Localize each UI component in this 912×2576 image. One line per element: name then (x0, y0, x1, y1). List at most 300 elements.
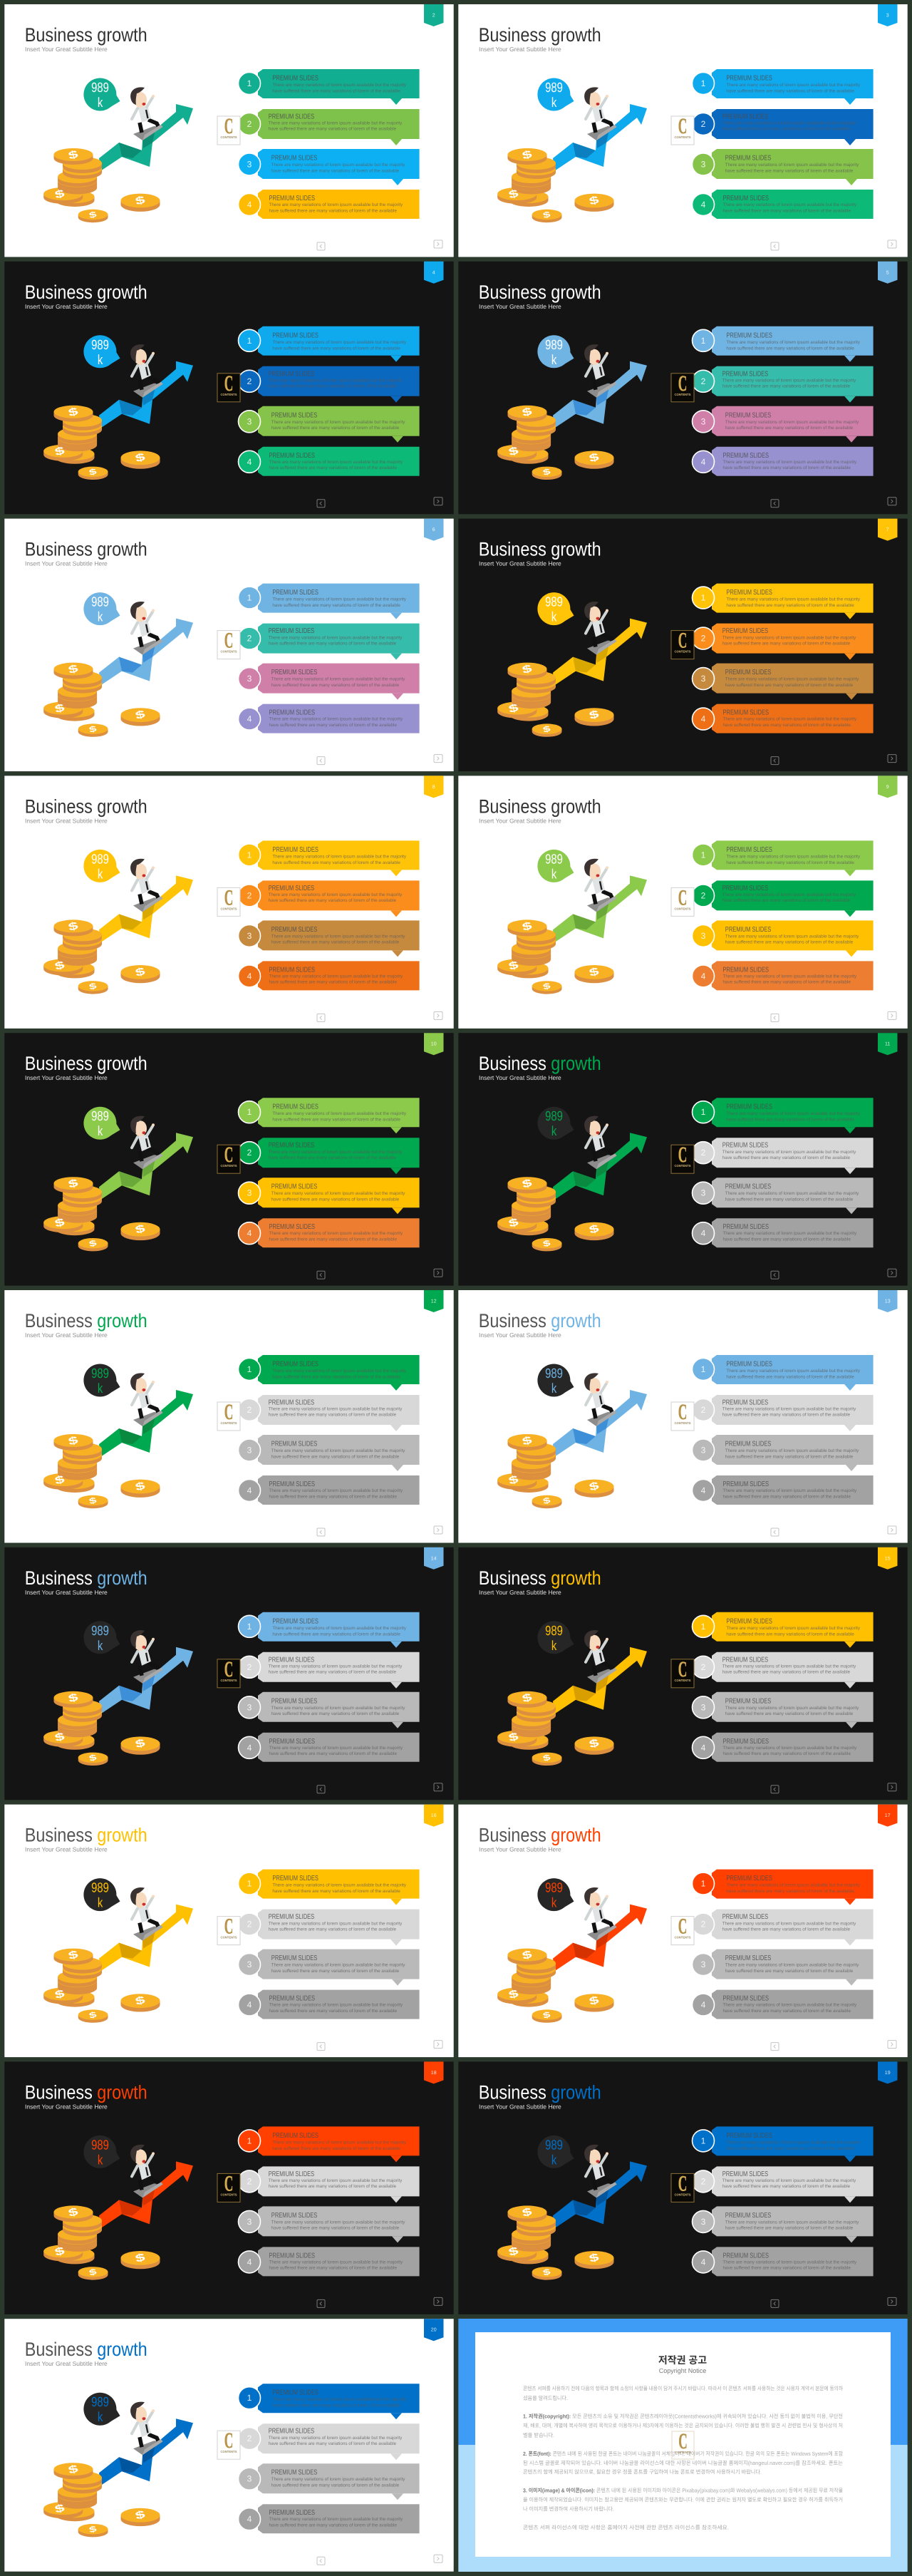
speech bubble: 989 (91, 1366, 109, 1381)
list item 1: 1 (247, 2135, 252, 2145)
page tag (424, 2319, 443, 2341)
list item 1: PREMIUM SLIDES (726, 589, 772, 597)
speech bubble (83, 1364, 120, 1397)
list item 3: have suffered there are many variations of lorem of the available (725, 1454, 854, 1459)
illustration: coins, arrow, businessman: $ (67, 1177, 80, 1191)
logo badge (217, 1142, 240, 1173)
list item 2: PREMIUM SLIDES (722, 113, 768, 121)
list item 2: PREMIUM SLIDES (722, 885, 768, 892)
list item 4 (238, 2247, 420, 2276)
illustration: coins, arrow, businessman: $ (134, 193, 147, 208)
illustration: coins, arrow, businessman: $ (88, 2267, 98, 2278)
logo badge: C (224, 885, 233, 910)
logo badge: CONTENTS (674, 135, 691, 139)
illustration: coins, arrow, businessman: $ (588, 2251, 601, 2265)
list item 4: There are many variations of lorem ipsum available but the majority (269, 1488, 403, 1493)
list item 2: 2 (247, 1405, 252, 1415)
illustration: coins, arrow, businessman: $ (67, 2205, 80, 2220)
list item 2: 2 (247, 634, 252, 644)
speech bubble: 989 (545, 338, 563, 353)
speech bubble: 989 (545, 852, 563, 867)
logo badge: CONTENTS (220, 1679, 237, 1682)
list item 3: PREMIUM SLIDES (271, 1697, 318, 1705)
list item 3: 3 (701, 160, 706, 170)
notice body text: 2. 폰트(font): 콘텐츠 내에 된 사용된 한글 폰트는 네이버 나눔글꼴의 서체입니다. 네이버가 저작권이 있습니다. 한글 외의 모든 폰트는 Windows System에 포함 (523, 2451, 843, 2457)
list item 3: have suffered there are many variations of lorem of the available (725, 1969, 854, 1974)
list item 3 (238, 1949, 420, 1986)
subtitle: Insert Your Great Subtitle Here (479, 817, 561, 824)
speech bubble: 989 (91, 1881, 109, 1896)
list item 2 (693, 1395, 874, 1431)
illustration: coins, arrow, businessman (497, 2145, 647, 2280)
list item 3 (693, 2206, 874, 2242)
list item 1 (238, 1098, 420, 1133)
list item 3: There are many variations of lorem ipsum available but the majority (271, 2477, 405, 2482)
illustration: coins, arrow, businessman: $ (588, 1222, 601, 1237)
list item 4 (238, 1218, 420, 1247)
page tag (878, 1547, 898, 1570)
illustration: coins, arrow, businessman (43, 344, 193, 480)
list item 2: PREMIUM SLIDES (269, 1398, 314, 1407)
list item 1: have suffered there are many variations of lorem of the available (726, 1118, 854, 1123)
list item 3 (238, 2463, 420, 2500)
list item 2 (238, 624, 420, 660)
list item 1: have suffered there are many variations of lorem of the available (726, 860, 854, 865)
logo badge: C (678, 885, 687, 910)
list item 1: There are many variations of lorem ipsum available but the majority (272, 340, 407, 345)
page tag (878, 1290, 898, 1312)
list item 1: 1 (247, 2393, 252, 2403)
list item 2 (238, 1138, 420, 1174)
list item 2: PREMIUM SLIDES (269, 113, 314, 121)
list item 4 (238, 961, 420, 990)
page tag: 20 (431, 2328, 437, 2333)
logo badge: C (678, 1142, 687, 1167)
title: Business growth (25, 1053, 147, 1074)
speech bubble (537, 1621, 574, 1654)
list item 1: have suffered there are many variations of lorem of the available (726, 1889, 854, 1894)
title: Business growth (479, 539, 601, 560)
illustration: coins, arrow, businessman (43, 2402, 193, 2537)
list item 2 (693, 2166, 874, 2203)
list item 3: 3 (701, 1188, 706, 1198)
logo badge (671, 1914, 694, 1945)
list item 1 (693, 1870, 874, 1905)
list item 2: There are many variations of lorem ipsum available but the majority (722, 1150, 856, 1155)
list item 4: There are many variations of lorem ipsum available but the majority (722, 460, 857, 465)
list item 2 (238, 366, 420, 403)
list item 3: There are many variations of lorem ipsum available but the majority (725, 2220, 859, 2225)
illustration: coins, arrow, businessman: $ (53, 187, 66, 202)
list item 2: have suffered there are many variations of lorem of the available (722, 1670, 851, 1675)
list item 4: PREMIUM SLIDES (722, 452, 769, 460)
list item 1: 1 (247, 1879, 252, 1889)
list item 4: 4 (247, 1485, 252, 1495)
list item 3 (238, 2206, 420, 2242)
navigation buttons (771, 240, 896, 250)
notice body text: 콘텐츠 서퍼 라이선스에 대한 사항은 홈페이지 사전에 관한 콘텐츠 라이선스를 참조하세요. (523, 2525, 729, 2531)
illustration: coins, arrow, businessman: $ (67, 148, 80, 163)
list item 3: PREMIUM SLIDES (725, 669, 772, 676)
slide 12 (4, 1290, 454, 1542)
speech bubble (83, 78, 120, 111)
list item 3: 3 (701, 674, 706, 684)
navigation buttons (317, 2555, 442, 2565)
list item 1: PREMIUM SLIDES (726, 1617, 772, 1625)
speech bubble: k (551, 1124, 557, 1139)
list item 3: 3 (701, 1959, 706, 1969)
list item 1: PREMIUM SLIDES (726, 74, 772, 83)
list item 4: have suffered there are many variations of lorem of the available (269, 980, 397, 985)
list item 4: There are many variations of lorem ipsum available but the majority (722, 1746, 857, 1751)
list item 4: have suffered there are many variations of lorem of the available (722, 1751, 851, 1756)
subtitle: Insert Your Great Subtitle Here (25, 1846, 108, 1853)
list item 1: 1 (247, 78, 252, 88)
list item 1: There are many variations of lorem ipsum available but the majority (272, 2140, 407, 2145)
list item 1 (238, 2384, 420, 2419)
list item 4: 4 (247, 457, 252, 467)
list item 4: 4 (247, 714, 252, 724)
illustration: coins, arrow, businessman: $ (134, 450, 147, 465)
list item 4: There are many variations of lorem ipsum available but the majority (722, 2260, 857, 2265)
illustration: coins, arrow, businessman: $ (521, 1691, 534, 1705)
list item 2: have suffered there are many variations of lorem of the available (269, 898, 397, 903)
notice heading: 저작권 공고 (658, 2354, 707, 2366)
list item 3: have suffered there are many variations of lorem of the available (271, 1197, 400, 1202)
list item 4: have suffered there are many variations of lorem of the available (722, 1494, 851, 1499)
title: Business growth (25, 2339, 147, 2360)
list item 3: have suffered there are many variations of lorem of the available (271, 683, 400, 688)
list item 4: 4 (701, 200, 706, 210)
list item 1: 1 (701, 1107, 706, 1117)
list item 4: have suffered there are many variations of lorem of the available (269, 1751, 397, 1756)
illustration: coins, arrow, businessman: $ (542, 468, 552, 478)
title: Business growth (25, 539, 147, 560)
speech bubble (83, 335, 120, 368)
list item 3 (238, 406, 420, 443)
list item 3: PREMIUM SLIDES (271, 1183, 318, 1191)
list item 1: There are many variations of lorem ipsum available but the majority (272, 1369, 407, 1374)
page tag: 6 (432, 527, 435, 532)
navigation buttons (317, 1011, 442, 1021)
logo badge: C (678, 1657, 687, 1681)
slide 16 (4, 1805, 454, 2057)
list item 2: There are many variations of lorem ipsum available but the majority (269, 121, 403, 126)
page tag (424, 262, 443, 284)
slide 3 (458, 4, 908, 257)
logo badge: C (224, 1657, 233, 1681)
list item 4 (693, 190, 874, 219)
list item 3 (693, 920, 874, 957)
list item 4: have suffered there are many variations of lorem of the available (722, 1237, 851, 1242)
speech bubble: k (98, 1639, 103, 1654)
illustration: coins, arrow, businessman: $ (88, 1753, 98, 1763)
list item 3: PREMIUM SLIDES (725, 2212, 772, 2220)
slide: copyright notice (458, 2319, 908, 2572)
slide 9 (458, 776, 908, 1029)
list item 1: PREMIUM SLIDES (272, 589, 318, 597)
list item 2: 2 (247, 890, 252, 900)
list item 2: 2 (247, 1920, 252, 1930)
notice body text: 1. 저작권(copyright): 모든 콘텐츠의 소유 및 저작권은 콘텐츠레이아웃(Contentstheworks)에 귀속되어져 있습니다. 사전 동의 없이 불법적 이용, 무단전 (523, 2413, 843, 2419)
logo badge: CONTENTS (220, 393, 237, 396)
list item 4: have suffered there are many variations of lorem of the available (269, 1237, 397, 1242)
list item 2: PREMIUM SLIDES (722, 1398, 768, 1407)
list item 2: PREMIUM SLIDES (269, 1913, 314, 1921)
illustration: coins, arrow, businessman: $ (53, 1730, 66, 1744)
illustration: coins, arrow, businessman: $ (521, 148, 534, 163)
page tag (878, 776, 898, 798)
illustration: coins, arrow, businessman: $ (88, 2525, 98, 2535)
list item 2: 2 (247, 119, 252, 129)
page tag (878, 2061, 898, 2083)
list item 3: 3 (701, 931, 706, 941)
list item 2: PREMIUM SLIDES (269, 1656, 314, 1664)
list item 4: have suffered there are many variations of lorem of the available (269, 465, 397, 470)
illustration: coins, arrow, businessman: $ (507, 959, 520, 973)
speech bubble: 989 (91, 338, 109, 353)
title: Business growth (25, 282, 147, 303)
page tag: 10 (431, 1042, 437, 1047)
list item 4: have suffered there are many variations of lorem of the available (722, 723, 851, 728)
list item 1: have suffered there are many variations of lorem of the available (272, 346, 400, 351)
speech bubble: k (98, 353, 103, 368)
illustration: coins, arrow, businessman: $ (542, 1239, 552, 1249)
speech bubble (83, 1621, 120, 1654)
speech bubble (537, 335, 574, 368)
list item 3: 3 (701, 416, 706, 426)
page tag: 16 (431, 1813, 437, 1818)
list item 3: There are many variations of lorem ipsum available but the majority (725, 1448, 859, 1453)
speech bubble (83, 592, 120, 625)
list item 1: There are many variations of lorem ipsum available but the majority (272, 2397, 407, 2402)
list item 4 (693, 2247, 874, 2276)
navigation buttons (317, 755, 442, 765)
logo badge: C (678, 2170, 687, 2195)
list item 3 (693, 664, 874, 700)
illustration: coins, arrow, businessman: $ (588, 965, 601, 979)
list item 1 (693, 1612, 874, 1648)
list item 3: There are many variations of lorem ipsum available but the majority (725, 1706, 859, 1711)
logo badge (671, 885, 694, 916)
navigation buttons (317, 498, 442, 508)
title: Business growth (25, 1567, 147, 1589)
navigation buttons (771, 2297, 896, 2307)
illustration: coins, arrow, businessman (497, 1887, 647, 2023)
speech bubble: 989 (545, 81, 563, 96)
list item 3: have suffered there are many variations of lorem of the available (271, 2483, 400, 2488)
illustration: coins, arrow, businessman: $ (507, 187, 520, 202)
list item 4 (238, 190, 420, 219)
illustration: coins, arrow, businessman: $ (53, 2245, 66, 2259)
subtitle: Insert Your Great Subtitle Here (25, 2103, 108, 2110)
logo badge: CONTENTS (220, 1936, 237, 1939)
illustration: coins, arrow, businessman: $ (88, 210, 98, 220)
list item 2: There are many variations of lorem ipsum available but the majority (722, 121, 856, 126)
speech bubble: 989 (545, 2138, 563, 2153)
list item 2: 2 (247, 1148, 252, 1158)
list item 3: have suffered there are many variations of lorem of the available (725, 683, 854, 688)
list item 2: There are many variations of lorem ipsum available but the majority (722, 1407, 856, 1412)
speech bubble (537, 850, 574, 882)
page tag: 19 (885, 2071, 891, 2076)
list item 2: 2 (701, 634, 706, 644)
list item 4: have suffered there are many variations of lorem of the available (269, 2009, 397, 2014)
list item 4: There are many variations of lorem ipsum available but the majority (269, 2003, 403, 2008)
list item 3: have suffered there are many variations of lorem of the available (271, 940, 400, 945)
list item 2: There are many variations of lorem ipsum available but the majority (722, 1921, 856, 1926)
list item 3: There are many variations of lorem ipsum available but the majority (271, 1448, 405, 1453)
logo badge: C (224, 1914, 233, 1939)
title: Business growth (479, 1825, 601, 1846)
list item 1: There are many variations of lorem ipsum available but the majority (726, 2140, 861, 2145)
list item 4: PREMIUM SLIDES (269, 966, 315, 974)
list item 1 (238, 69, 420, 105)
list item 4: 4 (247, 200, 252, 210)
list item 1: There are many variations of lorem ipsum available but the majority (726, 854, 861, 859)
list item 4: 4 (701, 2257, 706, 2267)
list item 1: have suffered there are many variations of lorem of the available (726, 346, 854, 351)
page tag (878, 262, 898, 284)
list item 1: have suffered there are many variations of lorem of the available (726, 88, 854, 94)
list item 3: 3 (247, 1959, 252, 1969)
list item 3: There are many variations of lorem ipsum available but the majority (271, 1706, 405, 1711)
list item 4: There are many variations of lorem ipsum available but the majority (269, 1231, 403, 1236)
list item 4: PREMIUM SLIDES (269, 452, 315, 460)
list item 2: 2 (247, 2176, 252, 2186)
list item 1: There are many variations of lorem ipsum available but the majority (272, 597, 407, 602)
list item 4: There are many variations of lorem ipsum available but the majority (722, 717, 857, 722)
list item 1: have suffered there are many variations of lorem of the available (726, 1374, 854, 1380)
page tag: 15 (885, 1556, 891, 1561)
speech bubble (537, 1364, 574, 1397)
illustration: coins, arrow, businessman (43, 2145, 193, 2280)
logo badge: CONTENTS (220, 650, 237, 654)
illustration: coins, arrow, businessman: $ (542, 982, 552, 992)
speech bubble: 989 (91, 2395, 109, 2410)
speech bubble (83, 1107, 120, 1140)
list item 1: 1 (247, 593, 252, 603)
list item 1: PREMIUM SLIDES (726, 1103, 772, 1111)
list item 2: have suffered there are many variations of lorem of the available (722, 383, 851, 388)
slide 11 (458, 1033, 908, 1286)
speech bubble: k (551, 867, 557, 882)
list item 3: PREMIUM SLIDES (725, 1697, 772, 1705)
speech bubble (83, 850, 120, 882)
list item 3: 3 (247, 1188, 252, 1198)
list item 4: have suffered there are many variations of lorem of the available (722, 2009, 851, 2014)
title: Business growth (25, 24, 147, 46)
list item 3: There are many variations of lorem ipsum available but the majority (725, 1191, 859, 1196)
list item 3: PREMIUM SLIDES (271, 2212, 318, 2220)
illustration: coins, arrow, businessman: $ (507, 1473, 520, 1488)
list item 1: PREMIUM SLIDES (272, 1617, 318, 1625)
page tag (424, 519, 443, 541)
page tag (424, 1033, 443, 1055)
list item 1: PREMIUM SLIDES (726, 1360, 772, 1369)
logo badge: C (224, 113, 233, 138)
speech bubble: 989 (91, 1109, 109, 1124)
list item 2: have suffered there are many variations of lorem of the available (269, 383, 397, 388)
list item 4: PREMIUM SLIDES (269, 1738, 315, 1746)
list item 2: PREMIUM SLIDES (269, 1142, 314, 1150)
illustration: coins, arrow, businessman: $ (521, 1177, 534, 1191)
list item 2: 2 (701, 119, 706, 129)
list item 1: have suffered there are many variations of lorem of the available (272, 1632, 400, 1637)
list item 1: PREMIUM SLIDES (272, 1103, 318, 1111)
list item 4: 4 (701, 971, 706, 981)
illustration: coins, arrow, businessman: $ (88, 2010, 98, 2021)
speech bubble: k (551, 1896, 557, 1911)
navigation buttons (771, 1783, 896, 1793)
illustration: coins, arrow, businessman: $ (507, 444, 520, 458)
list item 3: 3 (247, 2474, 252, 2484)
illustration: coins, arrow, businessman: $ (134, 2251, 147, 2265)
list item 3 (238, 664, 420, 700)
list item 4: PREMIUM SLIDES (722, 2252, 769, 2260)
list item 3: PREMIUM SLIDES (725, 1440, 772, 1448)
list item 2: There are many variations of lorem ipsum available but the majority (269, 1150, 403, 1155)
list item 2: There are many variations of lorem ipsum available but the majority (269, 1921, 403, 1926)
logo badge: CONTENTS (220, 1164, 237, 1168)
page tag (424, 1547, 443, 1570)
illustration: coins, arrow, businessman: $ (507, 701, 520, 716)
illustration: coins, arrow, businessman: $ (542, 724, 552, 735)
page tag (878, 4, 898, 26)
navigation buttons (317, 1783, 442, 1793)
list item 3: There are many variations of lorem ipsum available but the majority (271, 2220, 405, 2225)
notice body text: 재, 배포, 대여, 개별에 복사하여 영리 목적으로 이용하거나 제3자에게 이용하는 것은 금지되어 있습니다. 이러한 불법 행위 발견 시 관련법 민사 및 형사상의 처 (523, 2422, 843, 2429)
list item 3: There are many variations of lorem ipsum available but the majority (271, 420, 405, 425)
logo badge: CONTENTS (674, 650, 691, 654)
logo badge (217, 2170, 240, 2202)
list item 3: There are many variations of lorem ipsum available but the majority (725, 677, 859, 682)
list item 3: have suffered there are many variations of lorem of the available (271, 2226, 400, 2231)
list item 2 (693, 109, 874, 145)
page tag (424, 1805, 443, 1827)
list item 3: 3 (247, 416, 252, 426)
logo badge (671, 1142, 694, 1173)
speech bubble (537, 1107, 574, 1140)
logo badge: CONTENTS (674, 1936, 691, 1939)
list item 1: 1 (701, 78, 706, 88)
list item 1: have suffered there are many variations of lorem of the available (726, 2146, 854, 2151)
list item 3 (238, 1435, 420, 1471)
illustration: coins, arrow, businessman: $ (134, 1222, 147, 1237)
illustration: coins, arrow, businessman (43, 1630, 193, 1766)
subtitle: Insert Your Great Subtitle Here (479, 1846, 561, 1853)
list item 4: There are many variations of lorem ipsum available but the majority (722, 2003, 857, 2008)
list item 4: have suffered there are many variations of lorem of the available (269, 1494, 397, 1499)
speech bubble: k (551, 353, 557, 368)
illustration: coins, arrow, businessman (497, 1630, 647, 1766)
illustration: coins, arrow, businessman: $ (53, 1216, 66, 1230)
list item 3 (693, 406, 874, 443)
illustration: coins, arrow, businessman: $ (588, 450, 601, 465)
list item 1: PREMIUM SLIDES (272, 1360, 318, 1369)
list item 1 (238, 1870, 420, 1905)
list item 2 (238, 2166, 420, 2203)
list item 4: have suffered there are many variations of lorem of the available (722, 2266, 851, 2271)
title: Business growth (25, 795, 147, 817)
list item 4: PREMIUM SLIDES (269, 195, 315, 202)
illustration: coins, arrow, businessman: $ (588, 1994, 601, 2008)
speech bubble: k (98, 96, 103, 110)
list item 1: have suffered there are many variations of lorem of the available (272, 2146, 400, 2151)
list item 2: have suffered there are many variations of lorem of the available (269, 641, 397, 646)
list item 1: There are many variations of lorem ipsum available but the majority (726, 340, 861, 345)
list item 4: There are many variations of lorem ipsum available but the majority (269, 717, 403, 722)
